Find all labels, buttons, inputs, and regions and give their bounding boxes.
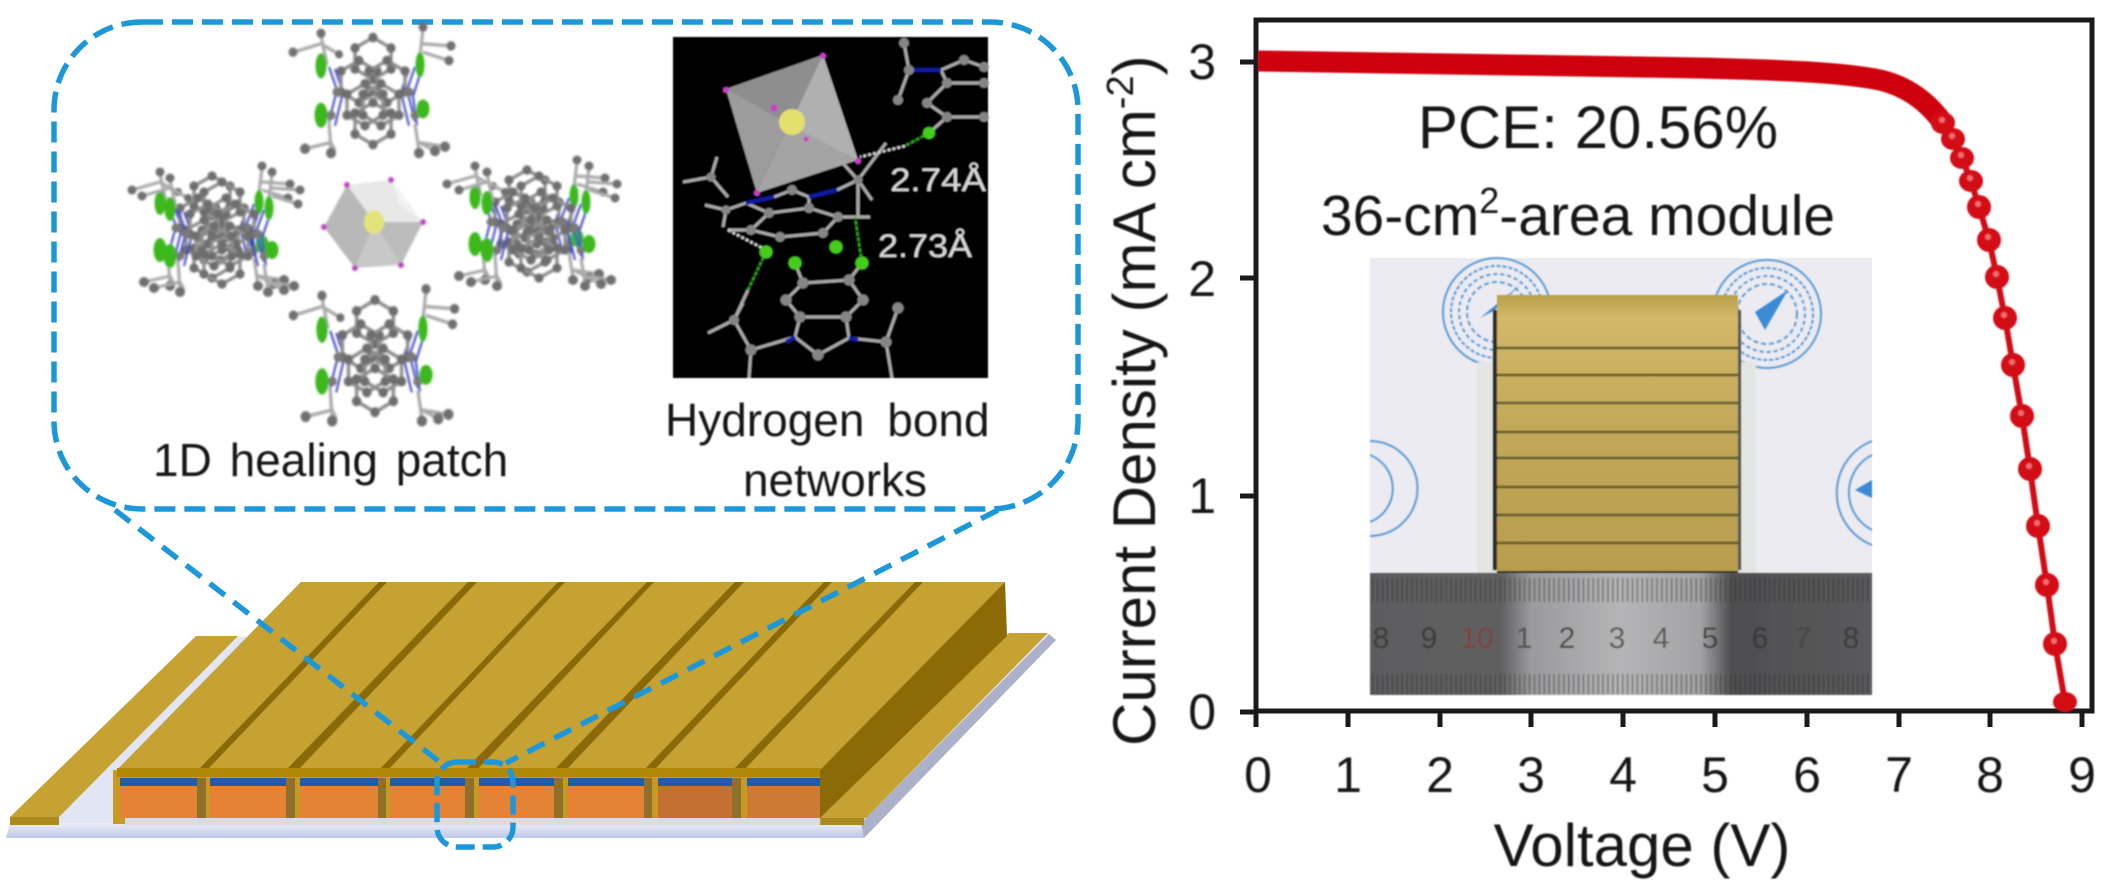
gold module bbox=[1493, 295, 1741, 574]
x tick labels: 1 bbox=[1334, 747, 1362, 803]
x tick labels bbox=[1244, 747, 2096, 803]
x tick labels: 6 bbox=[1793, 747, 1821, 803]
finger electrodes bbox=[117, 582, 1005, 777]
steel ruler: 2 bbox=[1559, 622, 1575, 655]
chart: current density vs voltage bbox=[1100, 20, 2096, 879]
x tick labels: 9 bbox=[2068, 747, 2096, 803]
callout: dashed zoom lines bbox=[115, 510, 998, 847]
molecule left bbox=[128, 162, 304, 297]
icon: central octahedron bbox=[321, 177, 426, 271]
axes frame bbox=[1256, 20, 2092, 711]
distance label 2.73: 2.73Å bbox=[878, 228, 973, 264]
steel ruler: 4 bbox=[1653, 622, 1669, 655]
panel: device schematic bbox=[6, 582, 1056, 838]
molecule right bbox=[442, 156, 622, 291]
steel ruler: 6 bbox=[1752, 622, 1768, 655]
x tick labels: 0 bbox=[1244, 747, 1272, 803]
y tick labels: 3 bbox=[1188, 34, 1216, 90]
steel ruler: 7 bbox=[1795, 622, 1811, 655]
y tick labels: 2 bbox=[1188, 251, 1216, 307]
inset photo: 36 cm2 module with ruler bbox=[1370, 258, 1872, 695]
annotation: module area: 2 bbox=[1479, 180, 1499, 221]
heading: 1D healing patch: 1D healing patch bbox=[153, 434, 508, 486]
glass substrate bbox=[6, 634, 1056, 838]
steel ruler: 1 bbox=[1516, 622, 1532, 655]
icon: octahedron in crystal bbox=[723, 53, 861, 196]
heading: Hydrogen bond networks bbox=[665, 394, 990, 506]
distance label 2.74: 2.74Å bbox=[890, 162, 987, 198]
x axis title: Voltage (V) bbox=[1494, 812, 1790, 879]
steel ruler: 9 bbox=[1421, 622, 1437, 655]
steel ruler: 8 bbox=[1373, 622, 1389, 655]
annotation: module area: -area module bbox=[1499, 184, 1835, 248]
panel: zoomed callout frame bbox=[54, 22, 1078, 509]
y tick labels: 1 bbox=[1188, 468, 1216, 524]
steel ruler: 5 bbox=[1702, 622, 1718, 655]
molecule bottom bbox=[289, 284, 459, 426]
axis ticks bbox=[1240, 62, 2082, 727]
y axis title: -2 bbox=[1100, 75, 1142, 109]
J-V curve bbox=[1258, 61, 2077, 712]
molecule top bbox=[288, 22, 456, 158]
y tick labels: 0 bbox=[1188, 684, 1216, 740]
seal stamps bbox=[1370, 258, 1872, 545]
annotation: module area: 36-cm bbox=[1321, 184, 1479, 248]
x tick labels: 3 bbox=[1517, 747, 1545, 803]
heading: Hydrogen bond networks: Hydrogen bond bbox=[665, 394, 990, 446]
steel ruler: 8 bbox=[1843, 622, 1859, 655]
left contact strip bbox=[10, 636, 238, 825]
heading: Hydrogen bond networks: networks bbox=[743, 454, 927, 506]
x tick labels: 5 bbox=[1701, 747, 1729, 803]
panel: 1D healing patch molecular structure bbox=[128, 22, 622, 427]
y tick labels bbox=[1188, 34, 1216, 740]
annotation: PCE: PCE: 20.56% bbox=[1418, 94, 1778, 161]
x tick labels: 7 bbox=[1885, 747, 1913, 803]
right contact strip bbox=[820, 633, 1048, 825]
steel ruler: 3 bbox=[1609, 622, 1625, 655]
x tick labels: 2 bbox=[1426, 747, 1454, 803]
steel ruler bbox=[1370, 573, 1872, 695]
panel: hydrogen bond network bbox=[673, 37, 989, 378]
bonds and atoms bbox=[683, 43, 984, 378]
y axis title: Current Density (mA cm bbox=[1101, 109, 1168, 746]
glass plate bbox=[1477, 362, 1756, 574]
steel ruler: 10 bbox=[1460, 622, 1494, 655]
x tick labels: 8 bbox=[1976, 747, 2004, 803]
dark side face bbox=[820, 582, 1007, 818]
y axis title: ) bbox=[1101, 55, 1168, 75]
front cell stack bbox=[113, 770, 821, 825]
x tick labels: 4 bbox=[1609, 747, 1637, 803]
